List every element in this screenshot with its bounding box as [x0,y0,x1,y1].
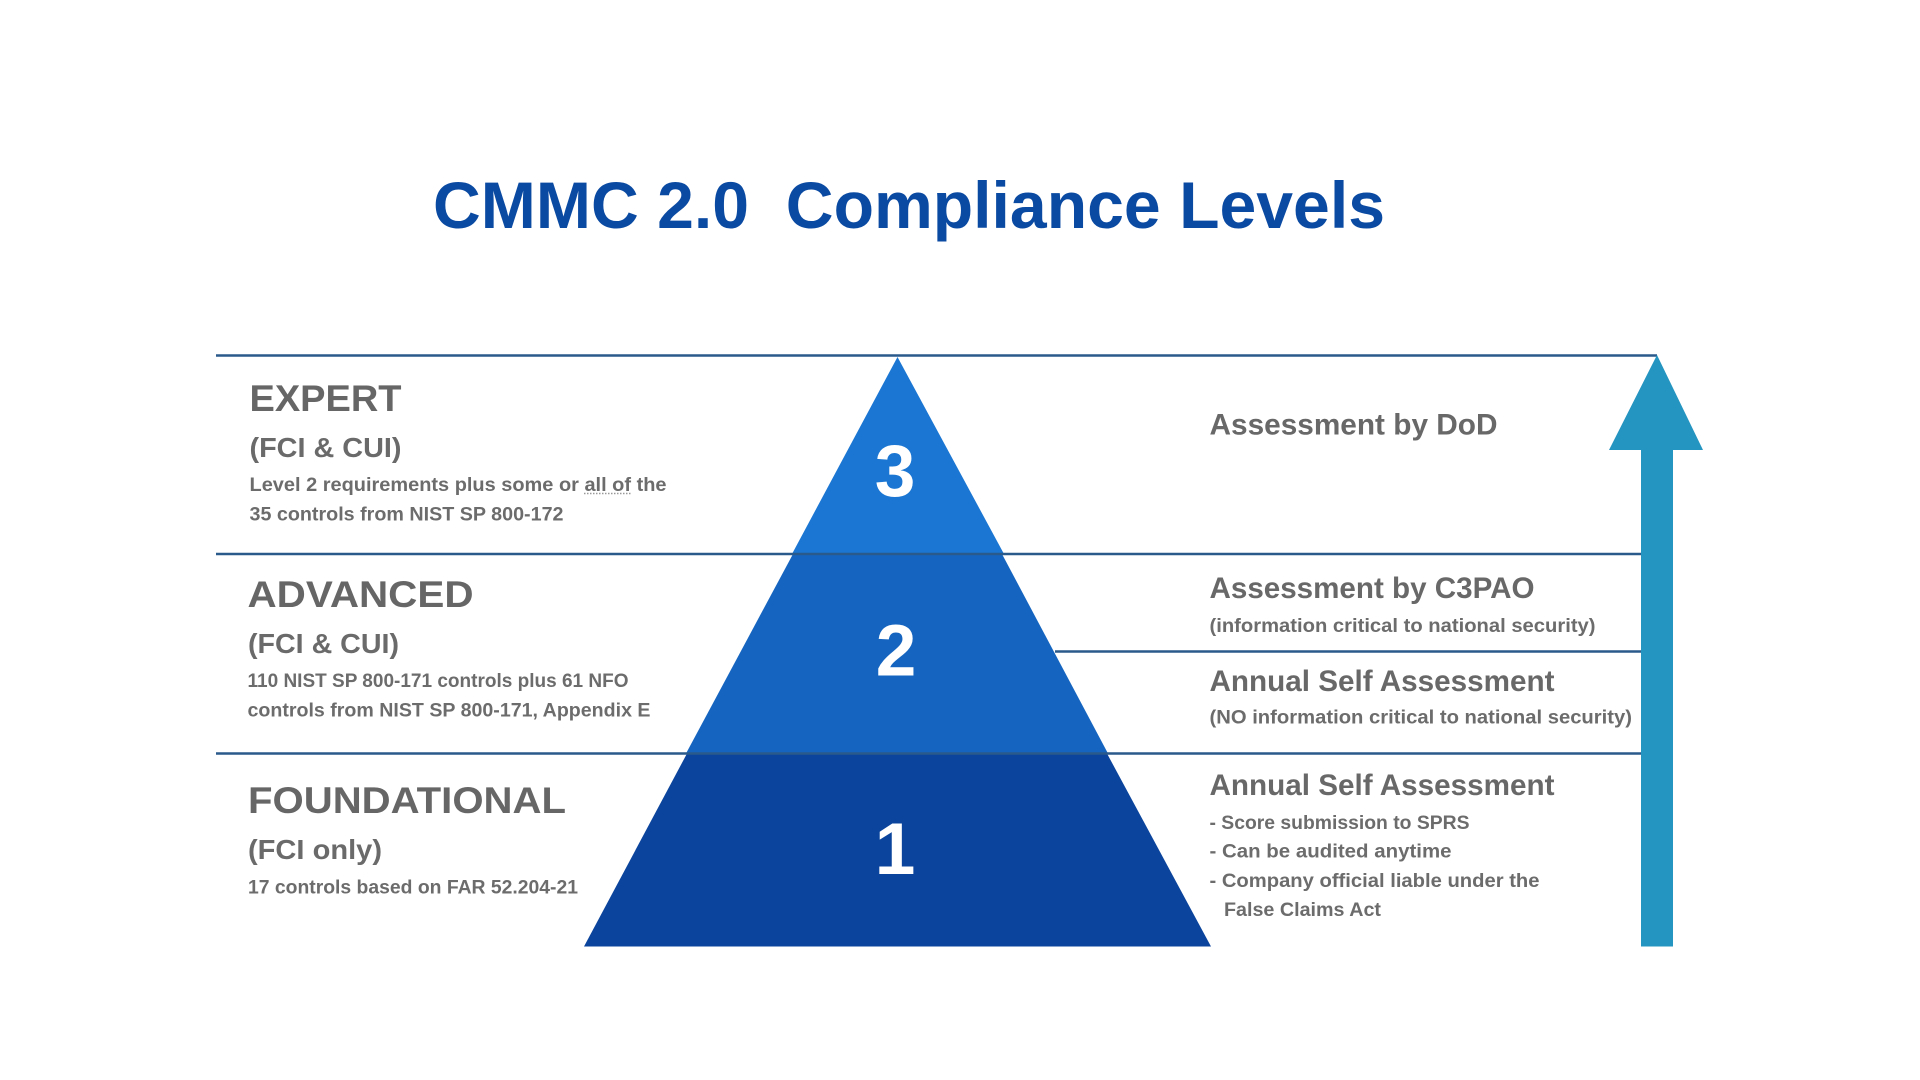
assessment: level 1 self: - Company official liable under the [1210,870,1540,892]
expert description: Level 2 requirements plus some or all of the [250,474,667,496]
assessment: level 2 self: Annual Self Assessment [1210,665,1555,698]
assessment: level 3: Assessment by DoD [1210,408,1498,442]
pyramid tier 1 [584,754,1211,946]
advanced description: 110 NIST SP 800-171 controls plus 61 NFO [248,670,628,692]
panel: foundational [248,780,578,898]
upward arrow [1609,355,1703,946]
pyramid tier 3 [792,357,1004,554]
panel: advanced [248,574,650,722]
advanced description: controls from NIST SP 800-171, Appendix E [248,700,650,722]
expert scope: (FCI & CUI) [250,432,402,463]
tier number 1: 1 [875,809,915,890]
assessment: level 2 self: (NO information critical to national security) [1210,706,1632,728]
assessment: level 1 self: False Claims Act [1224,899,1382,921]
assessment: level 2 C3PAO [1210,572,1596,637]
advanced scope: (FCI & CUI) [248,628,399,659]
pyramid tier 2 [686,554,1108,754]
foundational scope: (FCI only) [248,834,382,865]
assessment: level 2 self [1210,665,1632,728]
tier divider lines [216,356,1657,754]
assessment: level 1 self: - Can be audited anytime [1210,840,1452,862]
pyramid [584,357,1211,946]
expert description [250,474,667,526]
foundational heading: FOUNDATIONAL [248,780,566,821]
assessment: level 2 C3PAO: (information critical to national security) [1210,615,1596,637]
advanced description [248,670,650,722]
tier number 3: 3 [875,431,915,512]
foundational description: 17 controls based on FAR 52.204-21 [248,876,578,898]
expert heading: EXPERT [250,378,402,419]
title: CMMC 2.0 Compliance Levels [433,168,1385,242]
assessment: level 2 C3PAO: Assessment by C3PAO [1210,572,1534,605]
assessment: level 1 self: Annual Self Assessment [1210,769,1555,802]
expert description: 35 controls from NIST SP 800-172 [250,504,564,526]
tier number 2: 2 [876,610,916,692]
assessment: level 1 self [1210,769,1555,921]
panel: expert [250,378,667,526]
advanced heading: ADVANCED [248,574,474,615]
assessment: level 1 self: - Score submission to SPRS [1210,812,1470,834]
